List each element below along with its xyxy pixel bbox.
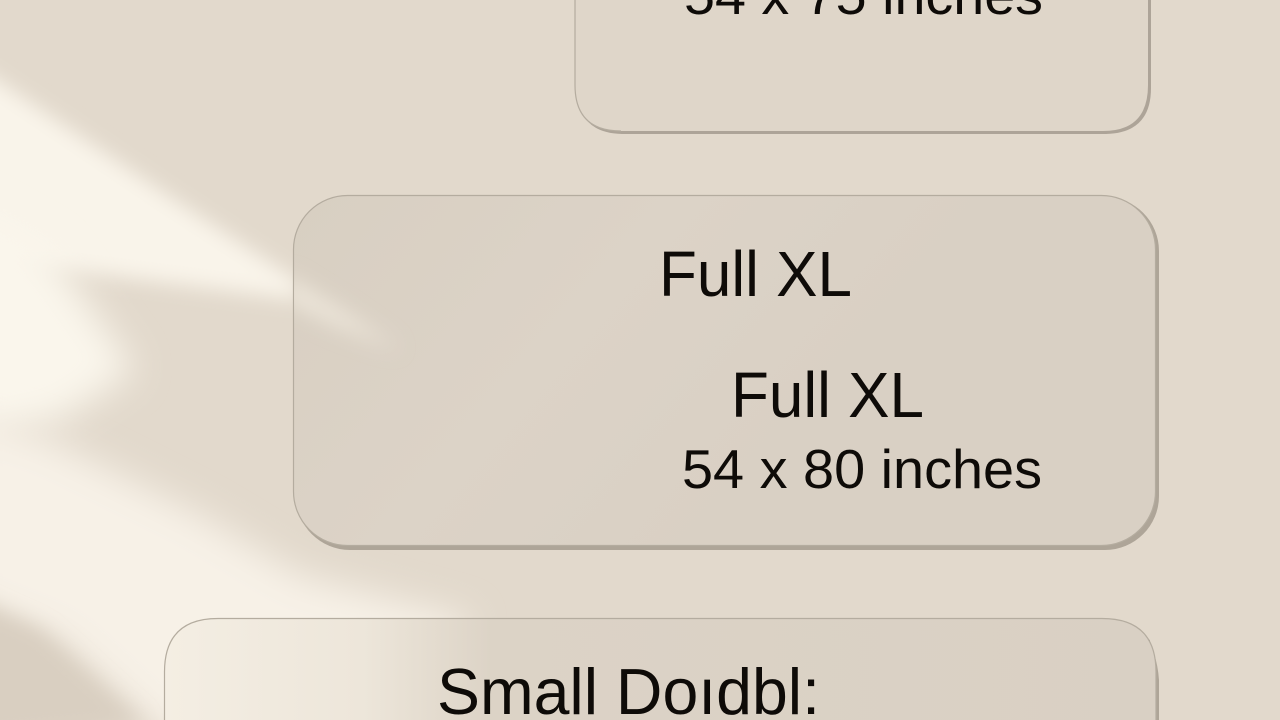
- panel: Small Double card (cropped at bottom): [164, 618, 1159, 720]
- text: Full XL name: Full XL: [731, 359, 924, 431]
- background: wall with window light: [0, 76, 459, 720]
- panel: Full size card (cropped at top): [575, 0, 1151, 134]
- text: Full XL dimensions: 54 x 80 inches: [682, 438, 1042, 500]
- heading: Full XL: Full XL: [659, 238, 852, 310]
- panel: Full XL card: [285, 196, 1159, 550]
